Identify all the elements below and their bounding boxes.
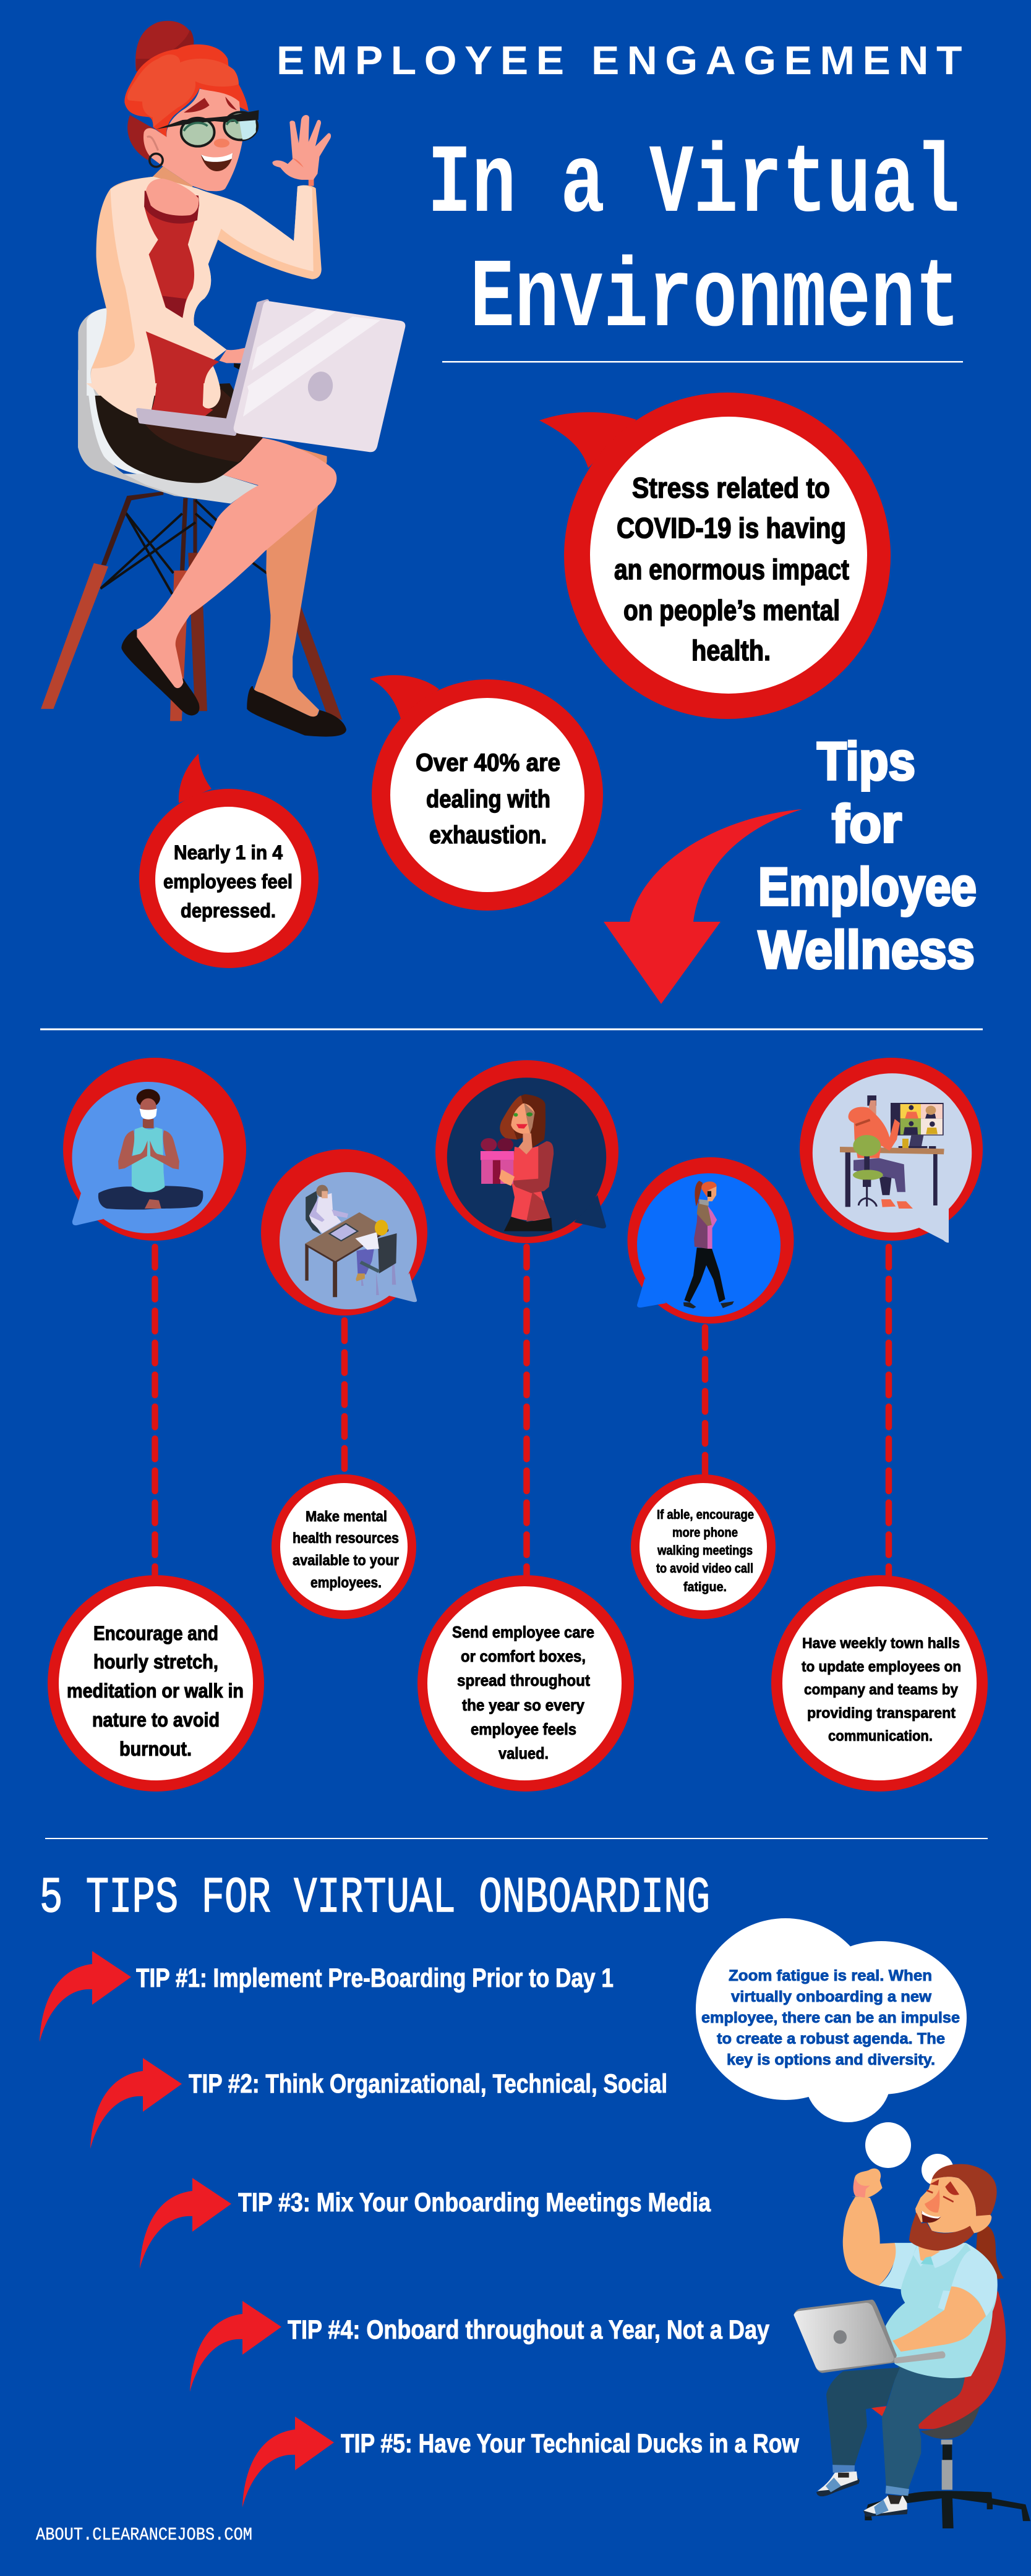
heading: tips for employee wellness bbox=[758, 732, 977, 980]
icon: two people at desk bbox=[305, 1185, 397, 1297]
speech bubble: exhaustion: exhaustion. bbox=[429, 822, 547, 849]
text bubble: stretch and meditation bbox=[48, 1575, 264, 1792]
text bubble: care boxes: Send employee care bbox=[452, 1623, 594, 1641]
text bubble: stretch and meditation: nature to avoid bbox=[92, 1709, 220, 1731]
laptop bbox=[138, 301, 405, 452]
icon: woman with gift box bbox=[481, 1094, 554, 1231]
speech bubble: stress: COVID-19 is having bbox=[617, 512, 846, 544]
icon: meditating person bbox=[98, 1089, 203, 1210]
tip 2 icon bubble: counselling desk bbox=[261, 1149, 427, 1316]
text bubble: town halls bbox=[771, 1575, 988, 1792]
text bubble: mental health resources: available to your bbox=[293, 1552, 399, 1569]
tip 5 row bbox=[242, 2417, 799, 2507]
text bubble: stretch and meditation: burnout. bbox=[119, 1738, 192, 1760]
text bubble: mental health resources: health resources bbox=[293, 1530, 399, 1547]
tip 1 icon bubble: meditation bbox=[63, 1058, 246, 1241]
speech bubble: exhaustion: dealing with bbox=[426, 786, 550, 813]
heading: tips for employee wellness: Tips bbox=[817, 732, 915, 791]
speech bubble: stress: an enormous impact bbox=[614, 553, 849, 585]
tip 4 row bbox=[190, 2301, 769, 2392]
text bubble: care boxes bbox=[417, 1575, 634, 1792]
thought cloud: zoom fatigue: Zoom fatigue is real. When bbox=[729, 1967, 932, 1984]
thought cloud: zoom fatigue: key is options and diversity. bbox=[727, 2051, 935, 2068]
speech bubble: depressed: employees feel bbox=[163, 870, 293, 893]
text bubble: mental health resources bbox=[272, 1474, 416, 1619]
text bubble: care boxes: spread throughout bbox=[457, 1671, 590, 1690]
thought cloud: zoom fatigue: employee, there can be an impulse bbox=[701, 2009, 960, 2026]
speech bubble: exhaustion: Over 40% are bbox=[416, 749, 560, 776]
illustration: man on office chair with laptop bbox=[794, 2164, 1030, 2528]
tip 2 row bbox=[90, 2058, 667, 2149]
text bubble: care boxes: or comfort boxes, bbox=[461, 1647, 586, 1665]
text bubble: town halls: to update employees on bbox=[802, 1659, 961, 1675]
text bubble: care boxes: employee feels bbox=[471, 1720, 576, 1738]
upper body bbox=[78, 21, 331, 396]
arrow: curved down bbox=[604, 809, 802, 1004]
speech bubble: stress: health. bbox=[691, 634, 771, 666]
heading: tips for employee wellness: Wellness bbox=[758, 920, 975, 980]
skirt front and blazer hem bbox=[86, 383, 234, 420]
thought cloud: zoom fatigue: virtually onboarding a new bbox=[731, 1988, 932, 2005]
text bubble: stretch and meditation: meditation or walk in bbox=[67, 1680, 244, 1702]
tip 2 row: TIP #2: Think Organizational, Technical, Social bbox=[189, 2069, 667, 2099]
text bubble: stretch and meditation: Encourage and bbox=[93, 1622, 218, 1644]
tip 4 row: TIP #4: Onboard throughout a Year, Not a Day bbox=[288, 2315, 769, 2345]
icon: man on video call at desk bbox=[840, 1095, 944, 1209]
heading: tips for employee wellness: Employee bbox=[758, 857, 977, 917]
tip 3 row: TIP #3: Mix Your Onboarding Meetings Media bbox=[238, 2188, 711, 2217]
text bubble: care boxes: valued. bbox=[498, 1744, 549, 1762]
text bubble: walking meetings: to avoid video call bbox=[656, 1562, 753, 1576]
text bubble: mental health resources: employees. bbox=[310, 1575, 382, 1591]
text bubble: town halls: providing transparent bbox=[807, 1705, 956, 1722]
heading: tips for employee wellness: for bbox=[832, 794, 902, 854]
tip 5 icon bubble: video call bbox=[800, 1058, 983, 1243]
text bubble: walking meetings bbox=[631, 1474, 776, 1619]
illustration: woman on stool with laptop bbox=[41, 21, 405, 737]
text bubble: walking meetings: more phone bbox=[672, 1526, 738, 1540]
text bubble: walking meetings: fatigue. bbox=[683, 1580, 727, 1594]
speech bubble: depressed bbox=[139, 754, 319, 968]
tip 3 row bbox=[140, 2178, 711, 2269]
text bubble: walking meetings: walking meetings bbox=[657, 1544, 753, 1558]
speech bubble: stress bbox=[539, 393, 891, 719]
text bubble: town halls: communication. bbox=[828, 1728, 933, 1745]
tip 4 icon bubble: walking on phone bbox=[627, 1157, 794, 1324]
speech bubble: stress: on people’s mental bbox=[623, 594, 840, 626]
title: in a virtual environment bbox=[427, 130, 960, 355]
text bubble: walking meetings: If able, encourage bbox=[657, 1508, 754, 1522]
icon: walking woman bbox=[683, 1181, 734, 1309]
speech bubble: stress: Stress related to bbox=[632, 472, 830, 504]
text bubble: care boxes: the year so every bbox=[462, 1696, 585, 1714]
tip 5 row: TIP #5: Have Your Technical Ducks in a Row bbox=[341, 2429, 799, 2459]
text bubble: town halls: company and teams by bbox=[804, 1681, 959, 1698]
tip 3 icon bubble: gift bbox=[435, 1060, 618, 1243]
heading: employee engagement: EMPLOYEE ENGAGEMENT bbox=[276, 38, 970, 83]
footer url: ABOUT.CLEARANCEJOBS.COM bbox=[36, 2525, 252, 2545]
speech bubble: depressed: Nearly 1 in 4 bbox=[174, 841, 283, 864]
dashed connectors bbox=[155, 1247, 889, 1575]
stool and legs bbox=[41, 370, 346, 737]
speech bubble: depressed: depressed. bbox=[181, 899, 276, 922]
tip 1 row: TIP #1: Implement Pre-Boarding Prior to Day 1 bbox=[136, 1963, 614, 1993]
text bubble: town halls: Have weekly town halls bbox=[802, 1635, 960, 1652]
speech bubble: exhaustion bbox=[370, 675, 603, 911]
tip 1 row bbox=[40, 1951, 614, 2042]
thought cloud: zoom fatigue bbox=[696, 1918, 967, 2186]
thought cloud: zoom fatigue: to create a robust agenda. The bbox=[717, 2030, 945, 2047]
heading: 5 tips for virtual onboarding: 5 TIPS FOR VIRTUAL ONBOARDING bbox=[40, 1869, 710, 1927]
text bubble: stretch and meditation: hourly stretch, bbox=[93, 1651, 218, 1673]
text bubble: mental health resources: Make mental bbox=[306, 1508, 387, 1525]
